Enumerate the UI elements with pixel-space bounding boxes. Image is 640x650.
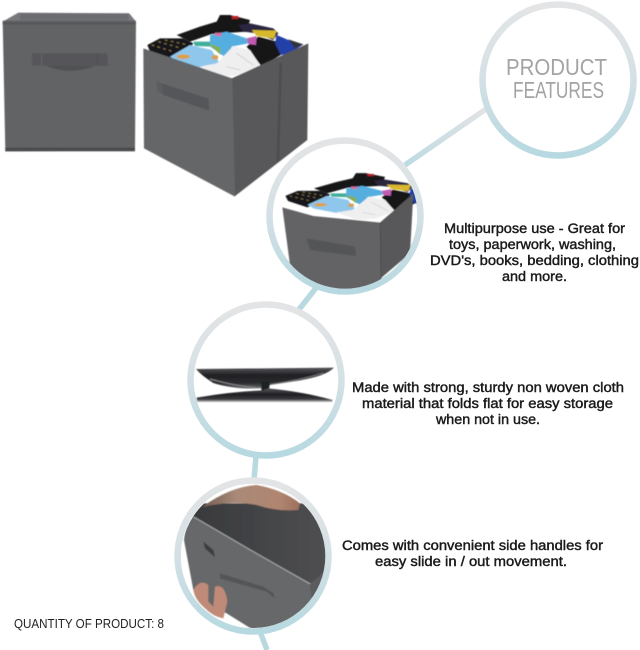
bin body xyxy=(143,43,308,197)
text: multipurpose use xyxy=(430,221,639,284)
heading: product features: PRODUCT xyxy=(506,54,607,80)
text: multipurpose use: toys, paperwork, washing, xyxy=(449,237,616,252)
feature ring: filled bin close-up xyxy=(270,140,437,292)
text: multipurpose use: and more. xyxy=(502,269,567,284)
feature ring: product features xyxy=(482,4,634,156)
clothes in bin xyxy=(147,15,303,77)
text: folds flat: Made with strong, sturdy non woven cloth xyxy=(352,380,624,395)
text: folds flat: material that folds flat for easy storage xyxy=(362,396,613,411)
feature ring: folded flat xyxy=(190,304,342,456)
heading: product features xyxy=(506,54,607,103)
text: multipurpose use: Multipurpose use - Great for xyxy=(444,221,626,236)
text: folds flat xyxy=(352,380,624,427)
text: side handles: Comes with convenient side handles for xyxy=(342,538,604,553)
feature ring: side handles xyxy=(178,480,330,632)
text: side handles: easy slide in / out movement. xyxy=(375,554,567,569)
icon: plain storage bin xyxy=(3,13,136,151)
connector lines xyxy=(254,109,486,650)
text: quantity of product: QUANTITY OF PRODUCT: 8 xyxy=(14,617,164,631)
photo: folded bin xyxy=(196,368,334,402)
text: folds flat: when not in use. xyxy=(435,412,540,427)
text: multipurpose use: DVD's, books, bedding, clothing xyxy=(430,253,639,268)
text: side handles xyxy=(342,538,604,569)
photo: hands holding bin xyxy=(184,485,330,630)
photo: filled bin xyxy=(282,172,416,289)
heading: product features: FEATURES xyxy=(513,77,604,103)
icon: filled storage bin xyxy=(143,15,308,197)
